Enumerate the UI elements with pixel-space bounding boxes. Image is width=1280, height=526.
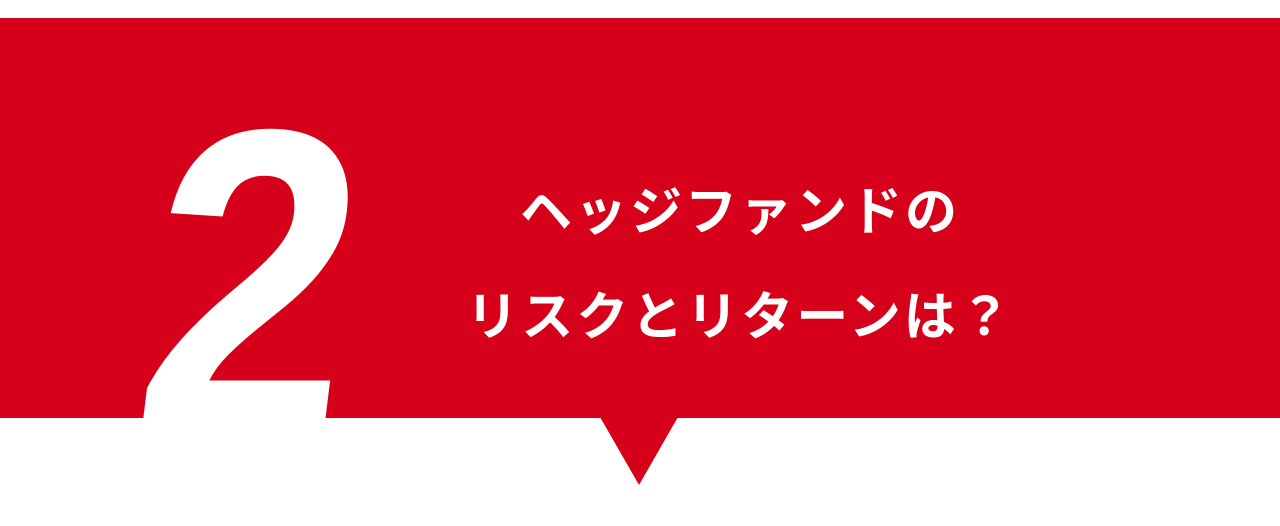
heading line 1: ヘッジファンドの [520,184,960,242]
red header band [0,18,1280,418]
big number 2: 2 [118,41,387,521]
heading line 2: リスクとリターンは？ [466,289,1014,347]
